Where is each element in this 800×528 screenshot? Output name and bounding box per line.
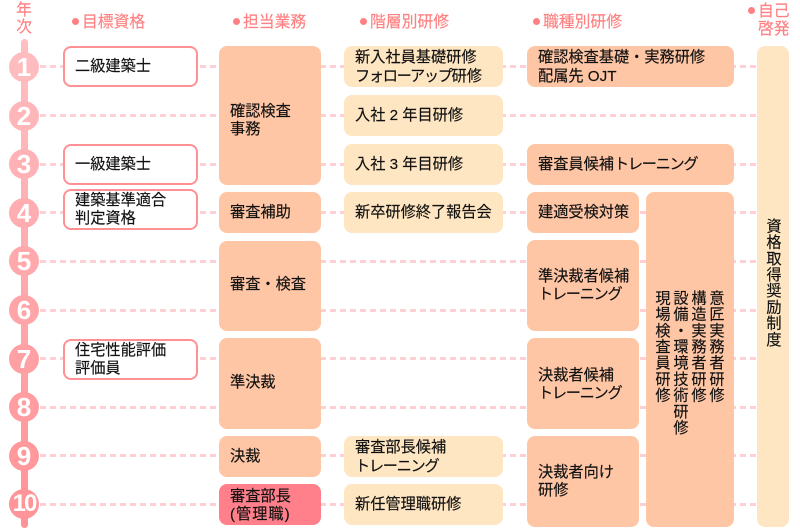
qualification: 住宅性能評価評価員: 住宅性能評価 (75, 342, 166, 358)
job training: 決裁者向け研修 (527, 436, 639, 527)
構造実務者研修: 構造実務者研修 (689, 290, 706, 403)
duty: 確認検査事務: 確認検査 (230, 102, 291, 120)
duty: 決裁: 決裁 (230, 448, 260, 465)
duty: 審査補助: 審査補助 (230, 204, 291, 221)
timeline spine (21, 39, 28, 528)
資格取得奨励制度 text: 資格取得奨励制度 (764, 218, 781, 348)
year badge 10 (9, 489, 39, 519)
year badge 4: 4 (17, 198, 31, 228)
qualification: 二級建築士 (63, 46, 198, 87)
job training: 確認検査基礎・実務研修: 確認検査基礎・実務研修 (538, 48, 705, 66)
qualification: 住宅性能評価評価員: 評価員 (75, 360, 121, 376)
heading: 自己啓発: 自己 (758, 3, 790, 20)
year badge 1 (9, 52, 39, 82)
duty: 決裁 (219, 436, 321, 477)
year badge 3: 3 (17, 149, 31, 179)
job training: 審査員候補トレーニング: 審査員候補トレーニング (538, 156, 697, 173)
year badge 10: 10 (13, 490, 35, 517)
year badge 5 (9, 246, 39, 276)
level training: 入社3年目研修: 入社 3 年目研修 (355, 156, 463, 173)
level training: 新卒研修終了報告会 (344, 192, 503, 233)
heading: 担当業務: 担当業務 (243, 14, 306, 31)
heading: 自己啓発: 啓発 (758, 21, 790, 38)
qualification: 建築基準適合判定資格: 建築基準適合 (75, 192, 166, 208)
qualification: 二級建築士: 二級建築士 (75, 58, 151, 75)
year badge 9 (9, 441, 39, 471)
job training: 決裁者候補トレーニング: トレーニング (538, 384, 621, 402)
duty: 審査部長(管理職): 審査部長 (230, 488, 291, 504)
level training: 新卒研修終了報告会: 新卒研修終了報告会 (355, 204, 492, 221)
job training: 確認検査基礎・実務研修 (527, 46, 734, 87)
qualification: 一級建築士: 一級建築士 (75, 156, 151, 173)
job training: 審査員候補トレーニング (527, 144, 734, 185)
duty: 確認検査事務: 事務 (230, 120, 260, 138)
qualification: 住宅性能評価評価員 (63, 339, 198, 380)
duty: 審査・検査 (219, 241, 321, 331)
year badge 4 (9, 198, 39, 228)
duty: 審査・検査: 審査・検査 (230, 276, 306, 293)
duty: 審査部長(管理職) (219, 484, 321, 525)
現場検査員研修: 現場検査員研修 (653, 290, 670, 403)
job training: 決裁者向け研修: 研修 (538, 482, 568, 498)
year badge 7: 7 (17, 344, 31, 374)
qualification: 一級建築士 (63, 144, 198, 185)
duty: 審査補助 (219, 192, 321, 233)
self development band: 資格取得奨励制度 (757, 46, 789, 527)
job training: 決裁者候補トレーニング (527, 338, 639, 429)
level training: 新任管理職研修 (344, 484, 503, 525)
year badge 6 (9, 295, 39, 325)
job training: 準決裁者候補トレーニング (527, 240, 639, 331)
level training: 入社2年目研修 (344, 95, 503, 136)
year badge 5: 5 (17, 246, 31, 276)
job training: 準決裁者候補トレーニング: 準決裁者候補 (538, 268, 629, 284)
qualification: 建築基準適合判定資格: 判定資格 (75, 210, 136, 226)
設備・環境技術研修: 設備・環境技術研修 (671, 290, 688, 436)
job training: vertical practical courses (646, 192, 734, 527)
job training: 決裁者向け研修: 決裁者向け (538, 464, 614, 480)
duty: 確認検査事務 (219, 46, 321, 185)
level training: 入社2年目研修: 入社 2 年目研修 (355, 107, 463, 124)
heading: 目標資格: 目標資格 (82, 14, 145, 31)
year badge 8: 8 (17, 392, 31, 422)
level training: 審査部長候補トレーニング (344, 436, 503, 477)
year badge 7 (9, 344, 39, 374)
year badge 2: 2 (17, 101, 31, 131)
job training: 建適受検対策 (527, 192, 639, 233)
level training: 審査部長候補トレーニング: 審査部長候補 (355, 438, 446, 456)
job training: 決裁者候補トレーニング: 決裁者候補 (538, 366, 614, 384)
year badge 1: 1 (17, 52, 31, 82)
level training: 審査部長候補トレーニング: トレーニング (355, 458, 438, 474)
level training: 新任管理職研修: 新任管理職研修 (355, 496, 461, 513)
year badge 2 (9, 101, 39, 131)
heading: 階層別研修: 階層別研修 (370, 14, 449, 31)
heading: 年次: 年次 (16, 2, 32, 36)
qualification: 建築基準適合判定資格 (63, 189, 198, 230)
level training: 新入社員基礎研修: フォローアップ研修 (355, 68, 482, 84)
duty: 準決裁: 準決裁 (230, 374, 276, 391)
heading: 職種別研修: 職種別研修 (543, 14, 622, 31)
job training: 確認検査基礎・実務研修: 配属先 OJT (538, 68, 616, 84)
job training: 準決裁者候補トレーニング: トレーニング (538, 286, 621, 302)
duty: 審査部長(管理職): (管理職) (230, 506, 291, 522)
year badge 3 (9, 149, 39, 179)
level training: 新入社員基礎研修 (344, 46, 503, 87)
year badge 9: 9 (17, 441, 31, 471)
heading: 自己啓発 (748, 2, 790, 38)
year badge 8 (9, 392, 39, 422)
duty: 準決裁 (219, 338, 321, 429)
意匠実務者研修: 意匠実務者研修 (707, 290, 724, 403)
level training: 入社3年目研修 (344, 144, 503, 185)
year badge 6: 6 (17, 295, 31, 325)
job training: 建適受検対策: 建適受検対策 (538, 204, 629, 221)
level training: 新入社員基礎研修: 新入社員基礎研修 (355, 48, 476, 66)
